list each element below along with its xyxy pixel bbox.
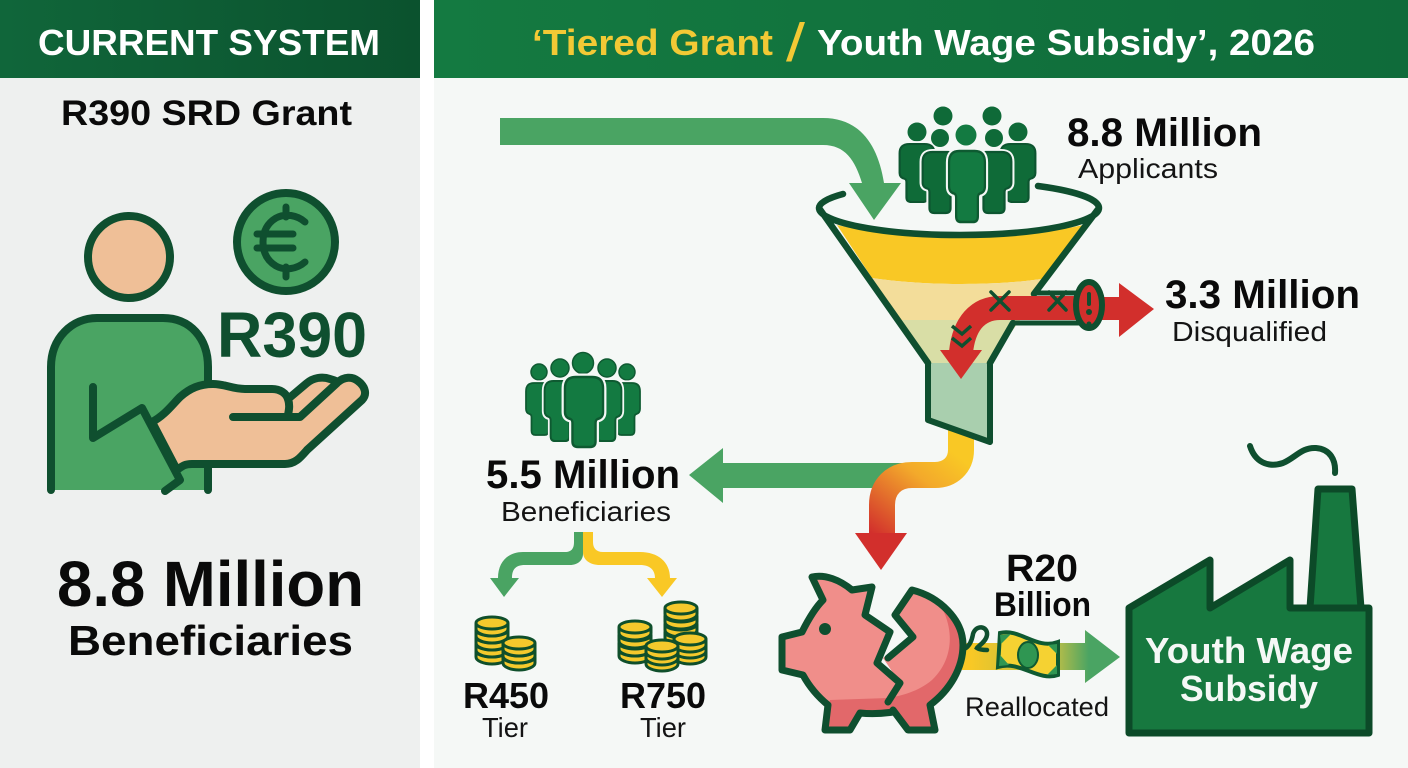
icon: funnel xyxy=(819,186,1099,442)
piggy: right half outline xyxy=(888,590,963,730)
icon: beneficiaries crowd xyxy=(526,352,640,447)
icon: factory xyxy=(1129,489,1369,733)
heading: tiered grant title: ‘Tiered Grant xyxy=(532,22,773,63)
icon: sleeve xyxy=(93,387,180,491)
arrow: funnel to piggy bank xyxy=(855,430,961,570)
icon: broken piggy bank xyxy=(782,576,987,730)
piggy: shading xyxy=(825,610,963,730)
funnel: olive band xyxy=(901,320,1020,363)
icon: large coin stacks xyxy=(619,602,706,671)
stat label: beneficiaries: Beneficiaries xyxy=(501,496,671,527)
icon: open hand xyxy=(152,378,365,470)
piggy: eye xyxy=(819,623,831,635)
subheading: R390 SRD Grant: R390 SRD Grant xyxy=(61,94,352,133)
factory: building xyxy=(1129,560,1369,733)
stat: billion: Billion xyxy=(994,586,1091,624)
stat: beneficiaries count: 5.5 Million xyxy=(486,453,680,497)
arrow: incoming applicants xyxy=(500,118,901,220)
piggy: left half outline xyxy=(782,576,900,730)
heading: youth wage subsidy: Youth Wage Subsidy’, 2026 xyxy=(817,22,1315,63)
stat: 8.8 million: 8.8 Million xyxy=(57,548,364,620)
icon: disqualified pipe xyxy=(940,282,1102,379)
heading: current system: CURRENT SYSTEM xyxy=(38,22,380,63)
stat label: beneficiaries: Beneficiaries xyxy=(68,617,353,664)
icon: person head xyxy=(88,216,170,298)
icon: hand finger lines xyxy=(233,383,337,417)
funnel: yellow band xyxy=(837,225,1083,284)
factory label line 2: Subsidy xyxy=(1180,668,1318,709)
label: R450 tier: Tier xyxy=(482,712,528,743)
panel: tiered grant xyxy=(434,0,1408,768)
piggy: left half fill xyxy=(782,576,900,730)
label: reallocated: Reallocated xyxy=(965,692,1109,722)
arrow: reallocated funds xyxy=(962,630,1120,683)
icon: euro coin xyxy=(237,193,335,291)
funnel: neck outline xyxy=(928,363,990,442)
icon: factory smoke xyxy=(1250,446,1335,473)
stat: disqualified count: 3.3 Million xyxy=(1165,273,1360,317)
piggy: right half fill xyxy=(883,590,963,730)
header bar: current system xyxy=(0,0,420,78)
header bar: tiered grant xyxy=(434,0,1408,78)
arrow: to R450 tier xyxy=(490,532,583,597)
funnel: neck xyxy=(928,363,990,442)
arrow: disqualified exit xyxy=(1095,283,1154,337)
stat: R20: R20 xyxy=(1006,548,1078,590)
factory: chimney xyxy=(1310,489,1361,608)
icon: small coin stacks xyxy=(476,617,535,670)
arrow: to beneficiaries xyxy=(689,448,915,503)
icon: person body xyxy=(51,318,208,490)
label: R390 amount: R390 xyxy=(217,299,367,371)
heading: slash: / xyxy=(786,13,805,73)
icon: applicants crowd xyxy=(900,106,1035,222)
factory label line 1: Youth Wage xyxy=(1145,630,1353,671)
stat: applicants count: 8.8 Million xyxy=(1067,111,1262,155)
stat label: applicants: Applicants xyxy=(1078,153,1218,184)
label: R750 tier: Tier xyxy=(640,712,686,743)
funnel: pale band xyxy=(872,278,1048,320)
label: R450: R450 xyxy=(463,675,549,716)
funnel: rim and walls xyxy=(819,186,1099,363)
icon: person receiving money xyxy=(51,193,365,491)
piggy: tail xyxy=(966,627,987,650)
label: R750: R750 xyxy=(620,675,706,716)
arrow: to R750 tier xyxy=(583,532,677,597)
panel: current system xyxy=(0,0,420,768)
icon: banknote xyxy=(998,632,1058,676)
stat label: disqualified: Disqualified xyxy=(1172,316,1327,347)
